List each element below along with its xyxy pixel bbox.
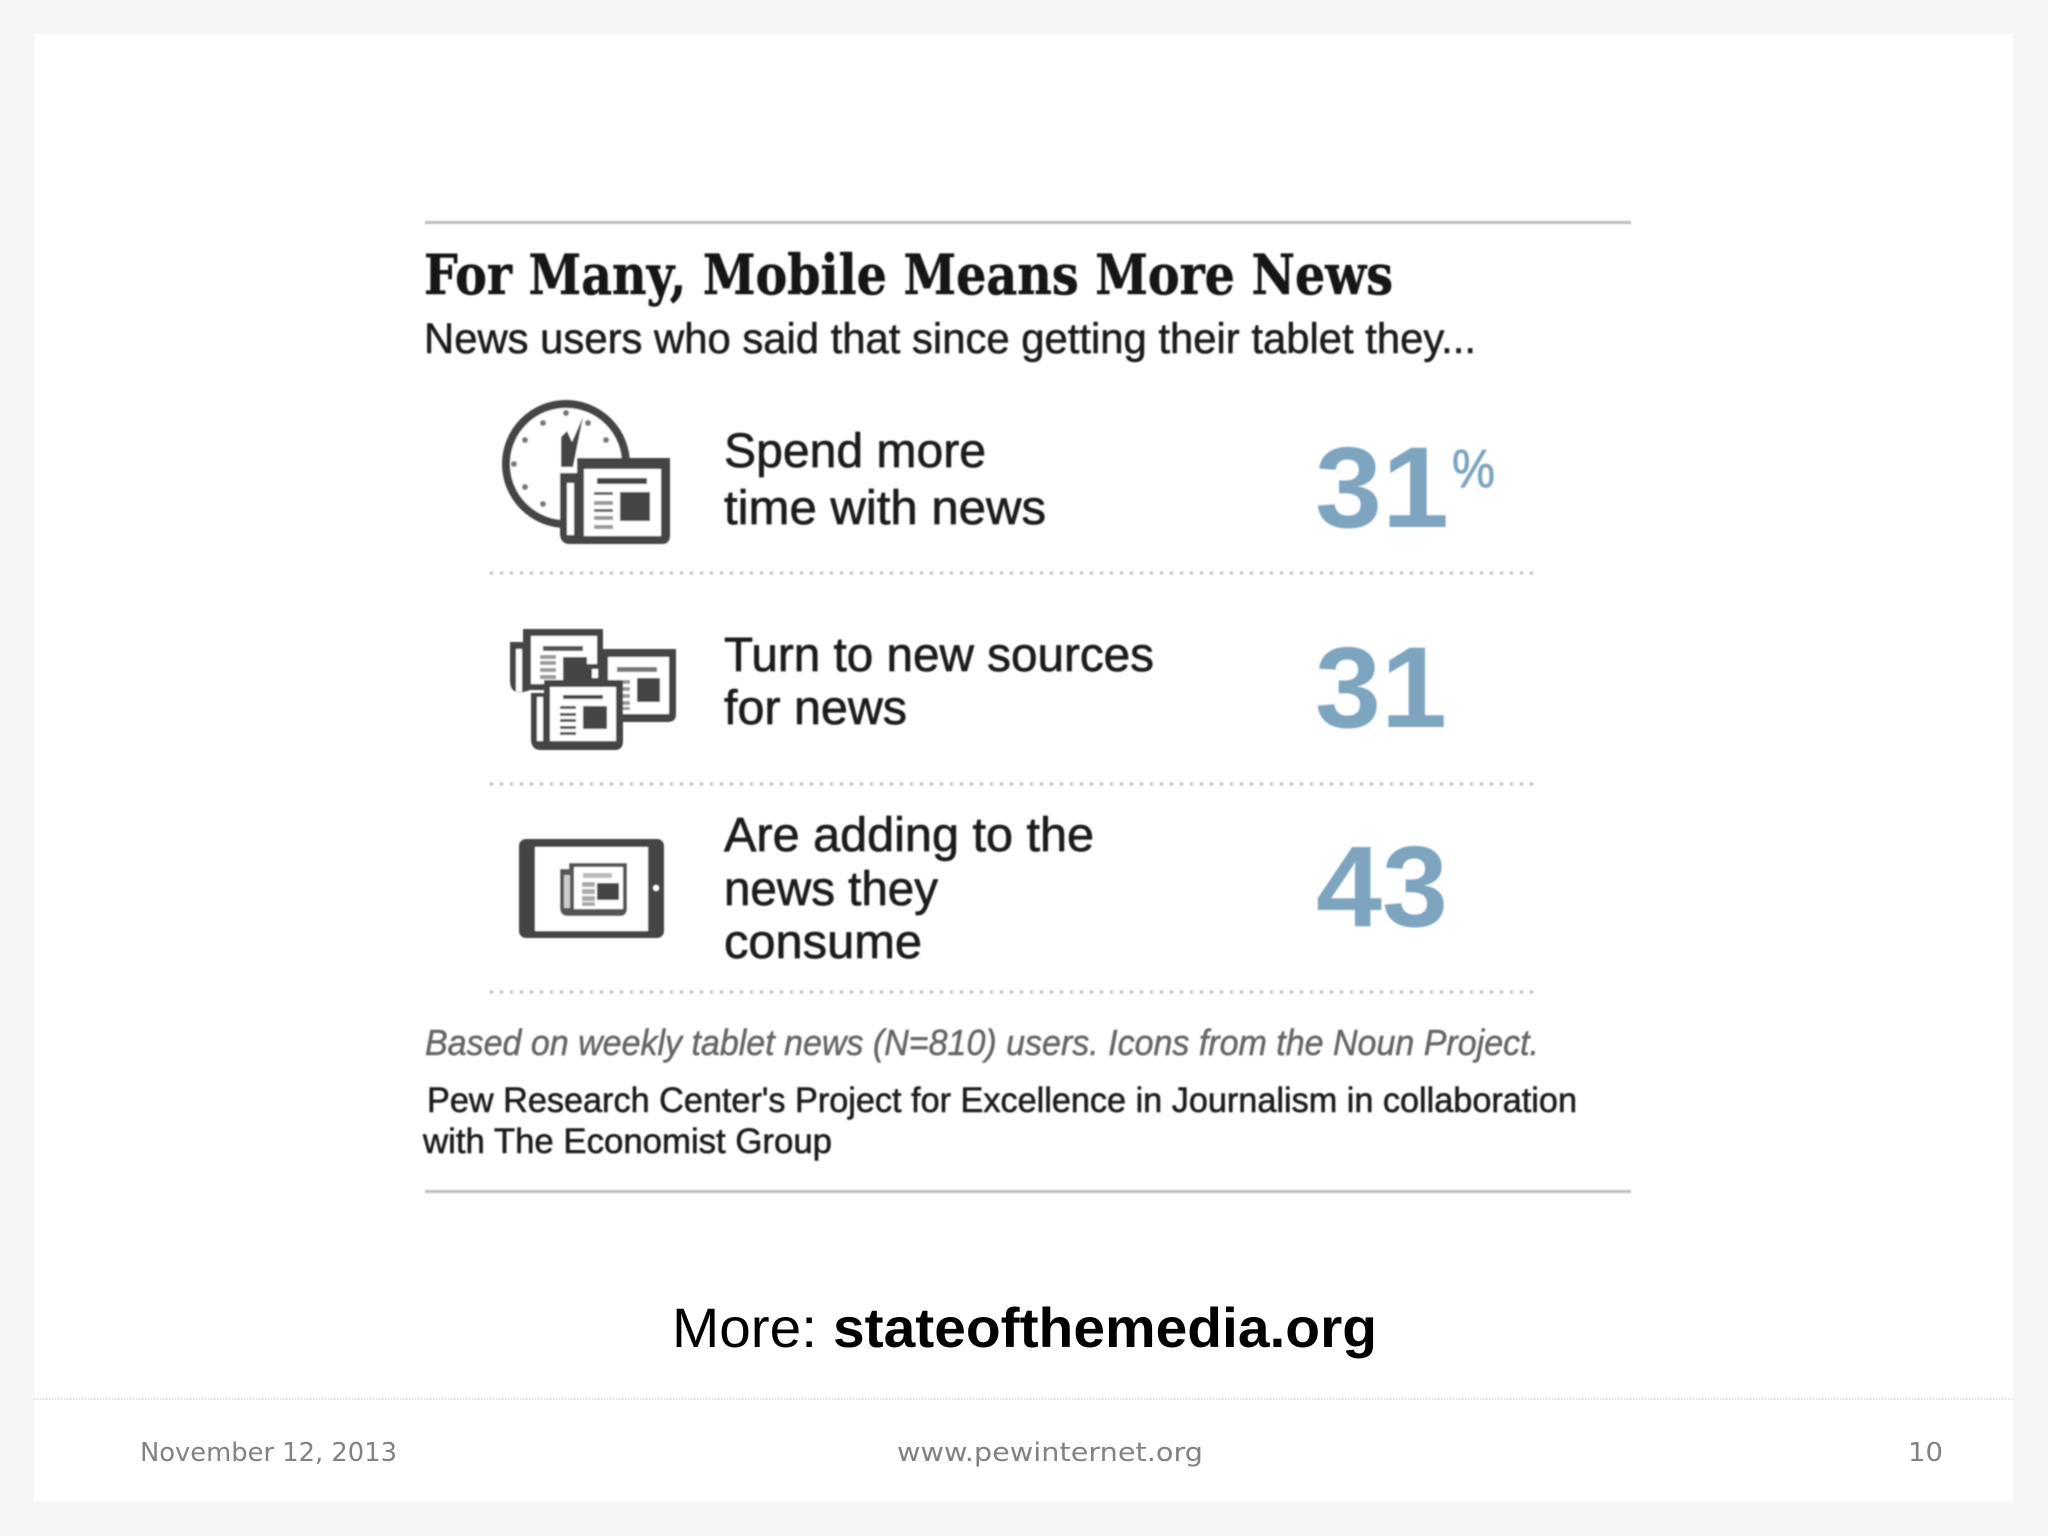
row 2 label: for news [724, 682, 907, 735]
row 3 label: news they [724, 863, 938, 916]
row 1 value: % [1452, 439, 1495, 499]
footer: page number: 10 [1908, 1438, 1943, 1468]
icon: stack of newspapers [510, 629, 676, 750]
row 2 label [724, 629, 1154, 735]
source credit: Pew Research Center's Project for Excellence in Journalism in collaboration [427, 1081, 1577, 1120]
row 3 value: 43 [1316, 823, 1448, 951]
row 3 label [724, 809, 1094, 969]
row 2 value: 31 [1315, 624, 1447, 752]
subtitle: News users who said that since getting their tablet they... [424, 315, 1476, 363]
row 3 label: consume [724, 916, 922, 969]
row 3 label: Are adding to the [724, 809, 1094, 862]
source credit [422, 1081, 1577, 1161]
more link: More: [672, 1296, 817, 1359]
row 2 label: Turn to new sources [724, 629, 1154, 682]
footer: website: www.pewinternet.org [897, 1438, 1203, 1468]
infographic card [422, 221, 1631, 1193]
row 1 label [724, 425, 1046, 535]
row 1 label: Spend more [724, 425, 986, 478]
footer: date: November 12, 2013 [140, 1438, 397, 1468]
icon: tablet with newspaper [519, 839, 664, 938]
more link: stateofthemedia.org [833, 1296, 1377, 1359]
row 1 value: 31 [1315, 424, 1449, 552]
icon: clock with newspaper [506, 404, 670, 544]
footnote: Based on weekly tablet news (N=810) users. Icons from the Noun Project. [425, 1022, 1539, 1063]
row 1 label: time with news [724, 482, 1046, 535]
source credit: with The Economist Group [422, 1122, 832, 1161]
title: For Many, Mobile Means More News [424, 242, 1393, 307]
